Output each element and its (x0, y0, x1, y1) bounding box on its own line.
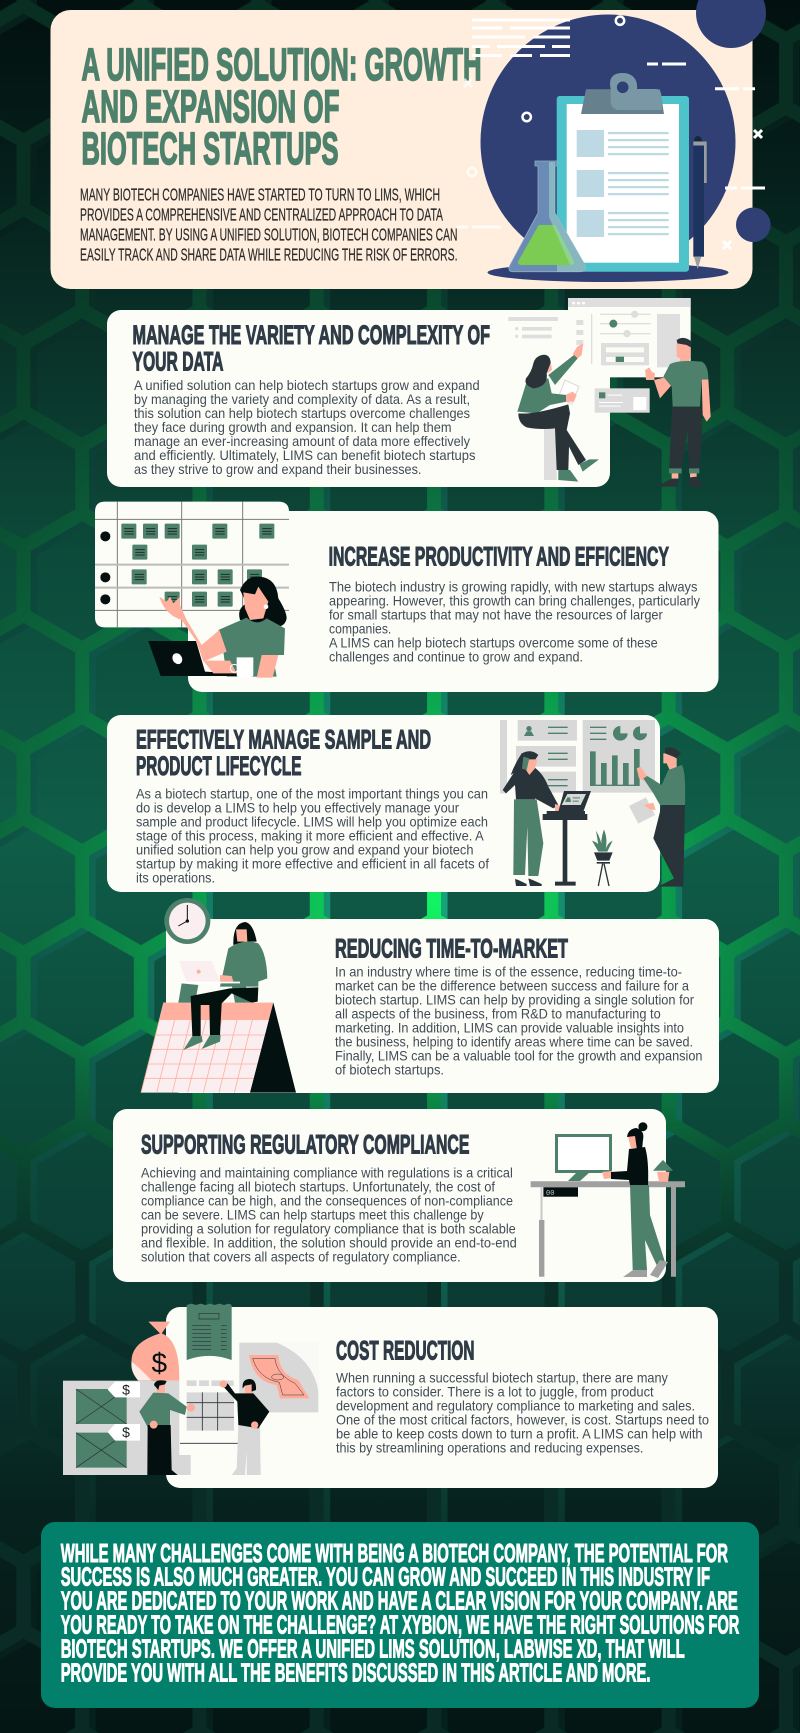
body text (329, 580, 700, 665)
price tag symbols (122, 1381, 130, 1440)
price tag symbols: $ (122, 1381, 130, 1397)
illustration: woman at standing desk (531, 1122, 685, 1278)
body text: solution that covers all aspects of regulatory compliance. (141, 1250, 461, 1265)
title: BIOTECH STARTUPS (82, 123, 338, 174)
body text: startup by making it more effective and efficient in all facets of (136, 857, 489, 872)
body text: and flexible. In addition, the solution should provide an end-to-end (141, 1236, 517, 1251)
body text: for small startups that may not have the resources of larger (329, 608, 663, 623)
heading (136, 725, 431, 781)
heading: PRODUCT LIFECYCLE (136, 751, 302, 781)
body text: In an industry where time is of the essence, reducing time-to- (335, 965, 682, 980)
body text: as they strive to grow and expand their businesses. (134, 462, 421, 477)
illustration: budgeting scene (63, 1304, 318, 1475)
intro text: PROVIDES A COMPREHENSIVE AND CENTRALIZED APPROACH TO DATA (80, 204, 443, 224)
body text: of biotech startups. (335, 1063, 444, 1078)
title: A UNIFIED SOLUTION: GROWTH (82, 39, 481, 90)
money bag symbol: $ (152, 1347, 168, 1378)
heading: COST REDUCTION (336, 1335, 474, 1365)
intro text (80, 184, 458, 264)
heading: MANAGE THE VARIETY AND COMPLEXITY OF (132, 320, 490, 350)
body text: A LIMS can help biotech startups overcome some of these (329, 636, 658, 651)
body text: companies. (329, 622, 391, 637)
illustration: colleagues at kiosk and analytics wall (500, 720, 685, 887)
body text: the business, helping to identify areas where time can be saved. (335, 1035, 693, 1050)
illustration: planner board and woman at laptop (95, 502, 289, 678)
body text: can be severe. LIMS can help startups meet this challenge by (141, 1208, 484, 1223)
body text: factors to consider. There is a lot to juggle, from product (336, 1385, 654, 1400)
title: AND EXPANSION OF (82, 81, 340, 132)
body text (136, 787, 489, 886)
body text: biotech startup. LIMS can help by providing a single solution for (335, 993, 694, 1008)
body text: One of the most critical factors, however, is cost. Startups need to (336, 1413, 709, 1428)
body text: this solution can help biotech startups overcome challenges (134, 406, 470, 421)
body text: its operations. (136, 871, 215, 886)
body text: When running a successful biotech startup, there are many (336, 1371, 668, 1386)
body text (335, 965, 702, 1078)
panel: cost reduction (63, 1304, 718, 1488)
heading: REDUCING TIME-TO-MARKET (335, 934, 568, 964)
body text: Finally, LIMS can be a valuable tool for the growth and expansion (335, 1049, 702, 1064)
desk control display: 00 (546, 1190, 554, 1198)
body text: Achieving and maintaining compliance with regulations is a critical (141, 1166, 513, 1181)
body text: challenge facing all biotech startups. Unfortunately, the cost of (141, 1180, 495, 1195)
closing text (61, 1540, 739, 1687)
illustration: clock, calendar and woman with laptop (141, 898, 296, 1093)
heading: SUPPORTING REGULATORY COMPLIANCE (141, 1130, 469, 1160)
body text: marketing. In addition, LIMS can provide valuable insights into (335, 1021, 684, 1036)
body text: do is develop a LIMS to help you effectively manage your (136, 801, 459, 816)
body text: manage an ever-increasing amount of data more effectively (134, 434, 470, 449)
body text: they face during growth and expansion. It can help them (134, 420, 452, 435)
body text: by managing the variety and complexity of data. As a result, (134, 392, 470, 407)
body text: unified solution can help you grow and expand your biotech (136, 843, 474, 858)
body text: The biotech industry is growing rapidly, with new startups always (329, 580, 697, 595)
heading: YOUR DATA (132, 347, 224, 377)
body text: stage of this process, making it more efficient and effective. A (136, 829, 484, 844)
body text: all aspects of the business, from R&D to manufacturing to (335, 1007, 661, 1022)
intro text: MANAGEMENT. BY USING A UNIFIED SOLUTION, BIOTECH COMPANIES CAN (80, 224, 458, 244)
body text: A unified solution can help biotech startups grow and expand (134, 378, 480, 393)
panel: header (50, 0, 771, 289)
price tag symbols: $ (122, 1424, 130, 1440)
intro text: MANY BIOTECH COMPANIES HAVE STARTED TO TURN TO LIMS, WHICH (80, 184, 440, 204)
body text: sample and product lifecycle. LIMS will help you optimize each (136, 815, 488, 830)
body text: As a biotech startup, one of the most important things you can (136, 787, 488, 802)
panel: closing call to action (41, 1522, 759, 1708)
title (82, 39, 481, 174)
heading: EFFECTIVELY MANAGE SAMPLE AND (136, 725, 431, 755)
panel: effectively manage sample and product lifecycle (107, 715, 685, 892)
body text (336, 1371, 709, 1456)
icon: clipboard and flask illustration (456, 0, 771, 282)
body text: development and regulatory compliance to marketing and sales. (336, 1399, 695, 1414)
illustration: team at dashboard window (508, 298, 711, 487)
panel: increase productivity and efficiency (95, 502, 719, 692)
panel: manage the variety and complexity (107, 298, 711, 487)
heading (132, 320, 490, 377)
body text: challenges and continue to grow and expand. (329, 650, 583, 665)
body text: market can be the difference between success and failure for a (335, 979, 689, 994)
body text: providing a solution for regulatory compliance that is both scalable (141, 1222, 516, 1237)
body text: this by streamlining operations and reducing expenses. (336, 1441, 643, 1456)
body text (134, 378, 480, 477)
body text: compliance can be high, and the consequences of non-compliance (141, 1194, 513, 1209)
body text: appearing. However, this growth can bring challenges, particularly (329, 594, 700, 609)
intro text: EASILY TRACK AND SHARE DATA WHILE REDUCING THE RISK OF ERRORS. (80, 244, 458, 264)
panel: reducing time-to-market (141, 898, 719, 1093)
body text (141, 1166, 517, 1265)
panel: supporting regulatory compliance (113, 1109, 685, 1282)
body text: and efficiently. Ultimately, LIMS can benefit biotech startups (134, 448, 476, 463)
body text: be able to keep costs down to turn a profit. A LIMS can help with (336, 1427, 703, 1442)
